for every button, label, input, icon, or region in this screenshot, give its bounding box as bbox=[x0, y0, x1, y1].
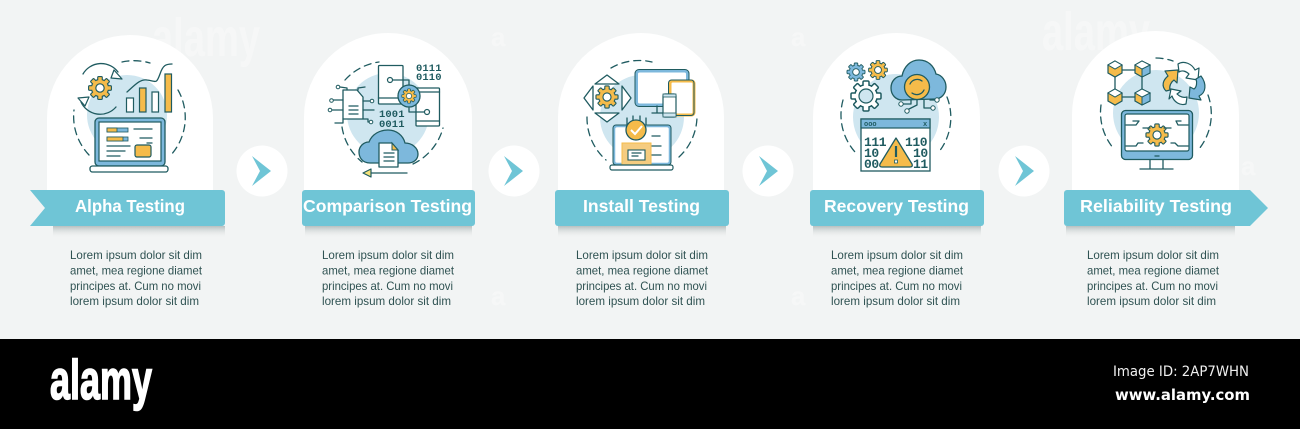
icon: recovery gears, cloud and alert window: 10 bbox=[864, 146, 879, 161]
icon: install testing laptop and devices bbox=[584, 60, 697, 170]
body text: principes at. Cum no movi bbox=[322, 279, 453, 293]
dome card bbox=[47, 35, 213, 191]
heading: Comparison Testing bbox=[303, 196, 472, 216]
watermarks: a bbox=[1241, 151, 1256, 181]
watermarks: a bbox=[791, 22, 806, 52]
body text: amet, mea regione diamet bbox=[1087, 264, 1220, 278]
panel: Install Testing bbox=[555, 33, 729, 308]
watermarks: alamy bbox=[1042, 2, 1150, 62]
body text: Lorem ipsum dolor sit dim bbox=[70, 248, 202, 262]
dome card bbox=[304, 33, 472, 191]
icon: recovery gears, cloud and alert window: 111 bbox=[864, 135, 887, 150]
body text: Lorem ipsum dolor sit dim bbox=[1087, 248, 1219, 262]
icon: recovery gears, cloud and alert window bbox=[841, 60, 951, 172]
watermarks bbox=[152, 2, 1256, 311]
footer bar bbox=[0, 339, 1300, 429]
panel: Alpha Testing bbox=[30, 35, 225, 308]
icon: comparison devices, document and cloud: 0110 bbox=[416, 72, 442, 84]
watermarks: a bbox=[491, 281, 506, 311]
ribbon bbox=[302, 190, 475, 226]
body text: Lorem ipsum dolor sit dim bbox=[576, 248, 708, 262]
icon: alpha testing laptop with gear and chart bbox=[74, 61, 185, 172]
body text bbox=[831, 248, 964, 308]
panel: Reliability Testing bbox=[1064, 31, 1268, 308]
icon: comparison devices, document and cloud bbox=[328, 62, 443, 177]
heading: Install Testing bbox=[583, 196, 700, 216]
icon: comparison devices, document and cloud: 0011 bbox=[379, 119, 405, 131]
body text: principes at. Cum no movi bbox=[1087, 279, 1218, 293]
watermarks: a bbox=[491, 22, 506, 52]
body text: amet, mea regione diamet bbox=[70, 264, 203, 278]
icon: comparison devices, document and cloud: 0111 bbox=[416, 63, 442, 75]
background bbox=[0, 0, 1300, 339]
body text: amet, mea regione diamet bbox=[322, 264, 455, 278]
body text bbox=[322, 248, 455, 308]
footer logo: alamy bbox=[50, 348, 152, 411]
body text: principes at. Cum no movi bbox=[831, 279, 962, 293]
ribbon bbox=[555, 190, 729, 226]
icon: reliability cubes, arrows and monitor bbox=[1100, 58, 1211, 169]
image id: Image ID: 2AP7WHN bbox=[1113, 364, 1249, 380]
heading: Reliability Testing bbox=[1080, 196, 1232, 216]
ribbon bbox=[1064, 190, 1268, 226]
body text: lorem ipsum dolor sit dim bbox=[322, 294, 451, 308]
arrow: step 2 to 3 bbox=[488, 146, 540, 196]
ribbon shadow bbox=[305, 226, 472, 238]
body text: lorem ipsum dolor sit dim bbox=[576, 294, 705, 308]
website: www.alamy.com bbox=[1115, 386, 1250, 404]
body text: amet, mea regione diamet bbox=[831, 264, 964, 278]
body text bbox=[70, 248, 203, 308]
dome card bbox=[813, 33, 980, 191]
icon: recovery gears, cloud and alert window: 00 bbox=[864, 157, 879, 172]
body text: Lorem ipsum dolor sit dim bbox=[322, 248, 454, 262]
icon: recovery gears, cloud and alert window: 11 bbox=[913, 157, 928, 172]
heading: Recovery Testing bbox=[824, 196, 969, 216]
icon: recovery gears, cloud and alert window: 10 bbox=[913, 146, 928, 161]
icon: recovery gears, cloud and alert window: ooo bbox=[864, 121, 877, 129]
dome card bbox=[1072, 31, 1239, 191]
body text bbox=[1087, 248, 1220, 308]
ribbon shadow bbox=[558, 226, 726, 238]
ribbon shadow bbox=[53, 226, 225, 238]
body text: lorem ipsum dolor sit dim bbox=[831, 294, 960, 308]
heading: Alpha Testing bbox=[75, 196, 185, 216]
ribbon bbox=[810, 190, 984, 226]
watermarks: a bbox=[791, 281, 806, 311]
dome card bbox=[558, 33, 724, 191]
body text: lorem ipsum dolor sit dim bbox=[1087, 294, 1216, 308]
body text: amet, mea regione diamet bbox=[576, 264, 709, 278]
watermarks: alamy bbox=[152, 8, 260, 68]
panel: Comparison Testing bbox=[302, 33, 475, 308]
body text: principes at. Cum no movi bbox=[576, 279, 707, 293]
icon: comparison devices, document and cloud: 1001 bbox=[379, 109, 405, 121]
body text: Lorem ipsum dolor sit dim bbox=[831, 248, 963, 262]
body text: lorem ipsum dolor sit dim bbox=[70, 294, 199, 308]
panel: Recovery Testing bbox=[810, 33, 984, 308]
ribbon shadow bbox=[1066, 226, 1235, 238]
arrow: step 1 to 2 bbox=[236, 146, 288, 196]
ribbon bbox=[30, 190, 225, 226]
arrow: step 3 to 4 bbox=[742, 146, 794, 196]
body text bbox=[576, 248, 709, 308]
arrow: step 4 to 5 bbox=[998, 146, 1050, 196]
ribbon shadow bbox=[813, 226, 981, 238]
body text: principes at. Cum no movi bbox=[70, 279, 201, 293]
icon: recovery gears, cloud and alert window: 110 bbox=[905, 135, 928, 150]
icon: recovery gears, cloud and alert window: x bbox=[923, 121, 928, 129]
